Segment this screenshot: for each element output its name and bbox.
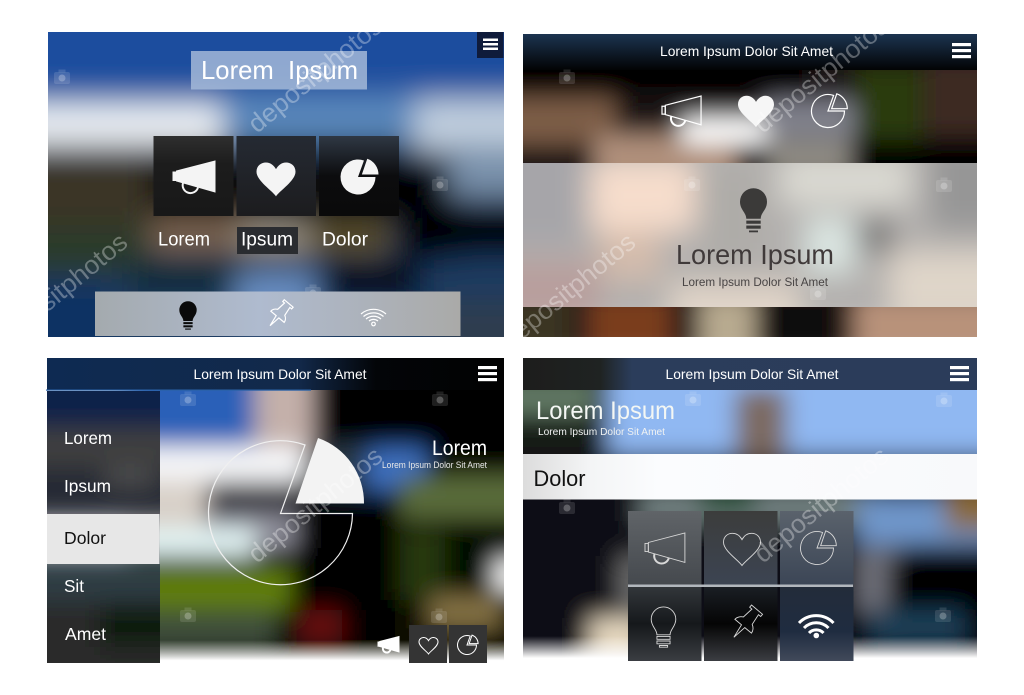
band: Dolor bbox=[523, 454, 977, 500]
header bar two bbox=[523, 34, 977, 70]
panel: screen three, sidebar and pie bbox=[46, 358, 504, 663]
menu item Sit: Sit bbox=[64, 576, 84, 596]
heading: Lorem Ipsum: Lorem Ipsum bbox=[676, 239, 834, 270]
sidebar blurred background bbox=[47, 391, 160, 663]
bottom white fade four bbox=[523, 636, 977, 662]
header bar four: Lorem Ipsum Dolor Sit Amet bbox=[666, 366, 839, 382]
tile: pie small bbox=[449, 625, 487, 663]
watermark text layer: depositphotos bbox=[748, 441, 894, 569]
menu item Dolor: Dolor bbox=[64, 528, 106, 548]
watermark text layer: depositphotos bbox=[495, 227, 641, 355]
tile: pie chart bbox=[319, 136, 399, 216]
icon: megaphone outline bbox=[662, 96, 701, 126]
heading: Lorem Ipsum: Lorem Ipsum bbox=[536, 397, 675, 425]
header bar three: Lorem Ipsum Dolor Sit Amet bbox=[194, 366, 367, 382]
blurred photo background top bbox=[523, 70, 977, 163]
sidebar menu bbox=[47, 391, 160, 663]
hamburger menu bbox=[477, 32, 504, 58]
watermark text layer: depositphotos bbox=[242, 441, 388, 569]
grid separator highlight bbox=[628, 584, 853, 587]
panel: screen four, icon grid bbox=[523, 358, 977, 661]
header bar three bbox=[46, 358, 504, 391]
caption: Lorem: Lorem bbox=[432, 437, 487, 460]
camera watermarks two bbox=[559, 70, 952, 300]
bottom icon bar bbox=[95, 292, 460, 336]
label: Ipsum selected: Ipsum bbox=[241, 230, 293, 250]
header bar four bbox=[523, 358, 977, 390]
hamburger menu two bbox=[952, 43, 971, 58]
icon: pie outline bbox=[812, 94, 847, 128]
hamburger menu three bbox=[478, 366, 497, 381]
selected row bbox=[47, 514, 160, 564]
panel: screen one, blue blurred landing bbox=[48, 32, 504, 337]
icon grid bbox=[628, 511, 854, 661]
blurred photo background four bbox=[523, 390, 977, 658]
tile: bulb outline bbox=[628, 587, 702, 661]
icon: push pin bbox=[263, 298, 295, 331]
icon: megaphone small bbox=[378, 636, 399, 653]
band: Dolor: Dolor bbox=[534, 466, 586, 491]
watermark text layer bbox=[0, 11, 894, 569]
label: Dolor: Dolor bbox=[322, 230, 369, 250]
label: Ipsum selected bbox=[237, 227, 298, 254]
tile: wifi bold bbox=[780, 587, 854, 661]
tile: pin outline bbox=[704, 587, 778, 661]
label: Lorem: Lorem bbox=[158, 230, 210, 250]
icon: bulb dark bbox=[740, 188, 767, 232]
blurred photo background one bbox=[48, 32, 504, 337]
tile: heart small bbox=[409, 625, 447, 663]
camera watermarks four bbox=[559, 392, 952, 622]
tile: megaphone outline bbox=[628, 511, 702, 584]
menu item Amet: Amet bbox=[65, 624, 106, 644]
panel: screen two, warm blurred with band bbox=[523, 34, 977, 337]
watermark text layer: depositphotos bbox=[748, 11, 894, 139]
tile: heart outline bbox=[704, 511, 778, 584]
tile: heart bbox=[236, 136, 316, 216]
camera watermarks bbox=[54, 70, 448, 299]
pie chart large bbox=[209, 438, 364, 585]
caption: sub text: Lorem Ipsum Dolor Sit Amet bbox=[382, 460, 487, 470]
title: Lorem Ipsum: Lorem Ipsum bbox=[201, 55, 358, 85]
menu item Ipsum: Ipsum bbox=[64, 476, 111, 496]
hamburger menu four bbox=[950, 366, 969, 381]
icon: bulb filled bbox=[179, 301, 197, 330]
menu item Lorem: Lorem bbox=[64, 428, 112, 448]
subheading: Lorem Ipsum Dolor Sit Amet bbox=[682, 275, 829, 289]
bottom white fade three bbox=[160, 640, 505, 664]
blurred band background bbox=[523, 163, 977, 307]
subheading four: Lorem Ipsum Dolor Sit Amet bbox=[538, 426, 665, 438]
icon: heart filled bbox=[738, 96, 774, 127]
tile: megaphone bbox=[154, 136, 234, 216]
tile: pie outline bbox=[780, 511, 854, 584]
watermark text layer: depositphotos bbox=[242, 11, 388, 139]
blurred background bottom strip bbox=[523, 307, 977, 337]
icon: wifi bbox=[361, 309, 386, 326]
header bar two: Lorem Ipsum Dolor Sit Amet bbox=[660, 43, 833, 59]
blurred photo background three bbox=[112, 390, 504, 660]
camera watermarks three bbox=[54, 392, 448, 623]
